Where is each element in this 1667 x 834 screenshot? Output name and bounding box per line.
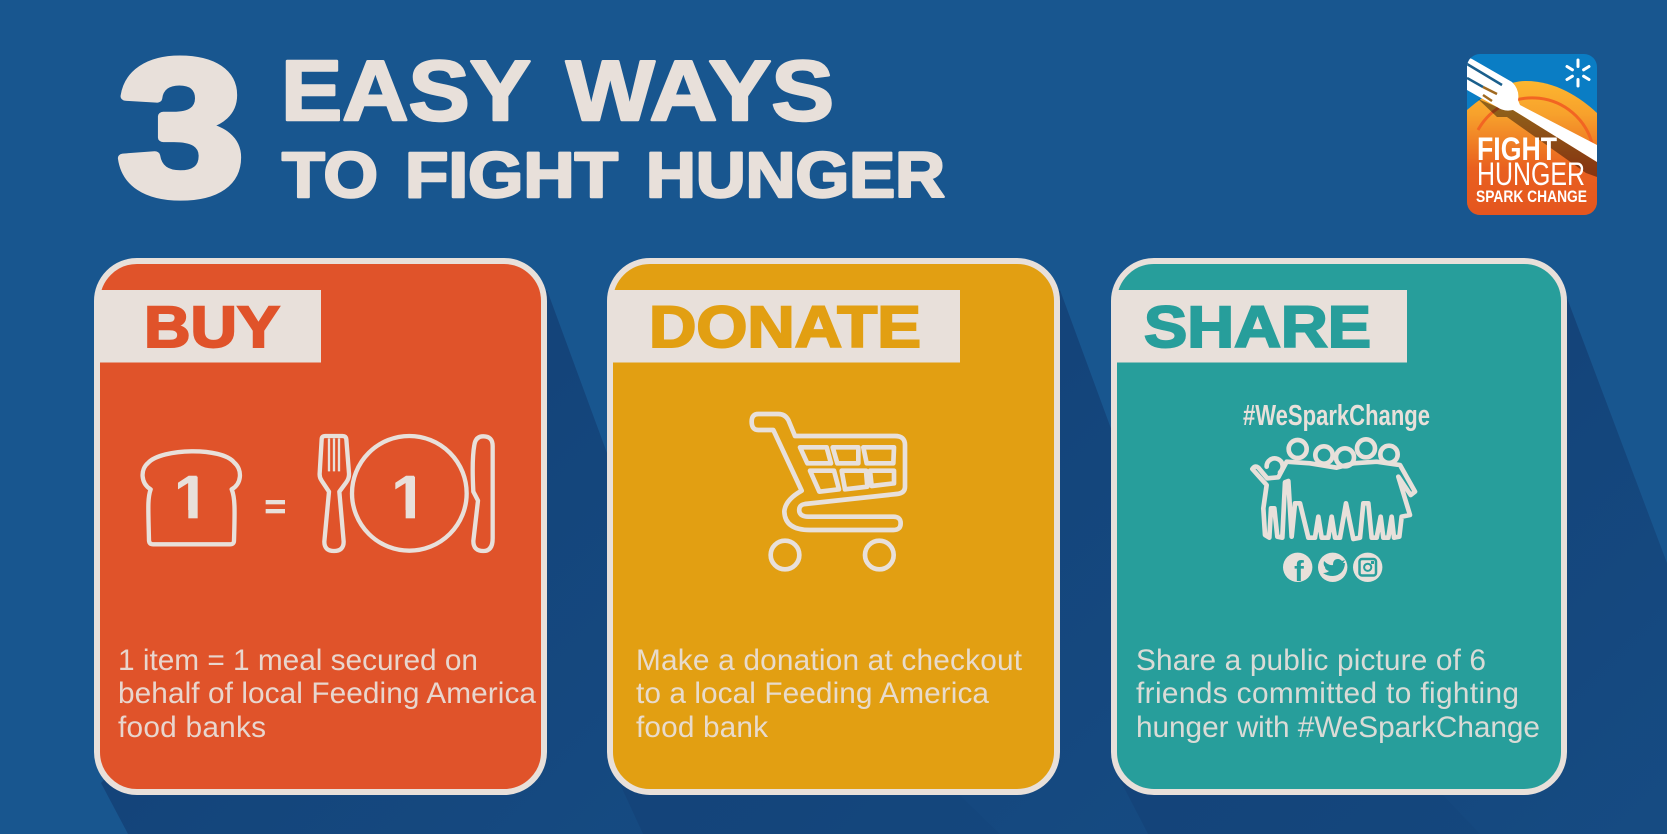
icon: facebook: f — [1294, 556, 1304, 588]
icon: bread equals plate with fork and knife — [143, 436, 493, 551]
heading line: to fight hunger — [282, 139, 945, 211]
panel: donate — [610, 261, 1057, 792]
label: share: SHARE — [1144, 295, 1371, 360]
numeral 3: 3 — [118, 20, 244, 235]
logo: fight hunger spark change — [1467, 54, 1597, 215]
heading line: to fight hunger: FIGHT — [405, 139, 618, 211]
logo: fight hunger spark change: HUNGER — [1477, 156, 1585, 192]
heading line: to fight hunger: TO — [282, 139, 378, 211]
icon: group of friends — [1252, 439, 1415, 539]
text: buy description: food banks — [118, 711, 266, 744]
text: share description: Share a public picture of 6 — [1136, 644, 1486, 677]
icon: shopping cart — [752, 414, 905, 569]
text: donate description: to a local Feeding America — [636, 677, 989, 710]
panel: buy — [97, 261, 544, 792]
text: donate description: Make a donation at checkout — [636, 644, 1023, 677]
hashtag: #WeSparkChange — [1243, 400, 1430, 432]
text: share description: hunger with #WeSparkChange — [1136, 711, 1540, 744]
heading line: easy ways: WAYS — [566, 44, 834, 139]
icon: bread equals plate with fork and knife: 1 — [174, 463, 208, 532]
panel: share — [1114, 261, 1564, 792]
icons: social media — [1283, 553, 1382, 588]
heading line: easy ways — [281, 44, 834, 139]
text: buy description — [118, 644, 536, 744]
heading line: to fight hunger: HUNGER — [646, 139, 945, 211]
heading line: easy ways: EASY — [281, 44, 531, 139]
label: donate — [610, 290, 960, 362]
text: buy description: 1 item = 1 meal secured on — [118, 644, 478, 677]
logo: fight hunger spark change: SPARK CHANGE — [1476, 188, 1587, 206]
text: donate description — [636, 644, 1023, 744]
text: share description — [1136, 644, 1540, 744]
text: donate description: food bank — [636, 711, 768, 744]
icon: twitter — [1318, 553, 1347, 582]
label: donate: DONATE — [649, 295, 921, 360]
title — [118, 20, 945, 235]
label: buy — [97, 290, 321, 362]
text: share description: friends committed to fighting — [1136, 677, 1519, 710]
label: share — [1114, 290, 1407, 362]
text: buy description: behalf of local Feeding America — [118, 677, 536, 710]
card long shadows — [101, 290, 1667, 834]
label: buy: BUY — [144, 295, 280, 360]
icon: bread equals plate with fork and knife: 1 — [391, 463, 426, 532]
icon: instagram — [1353, 553, 1382, 582]
logo: fight hunger spark change: FIGHT — [1477, 131, 1557, 167]
